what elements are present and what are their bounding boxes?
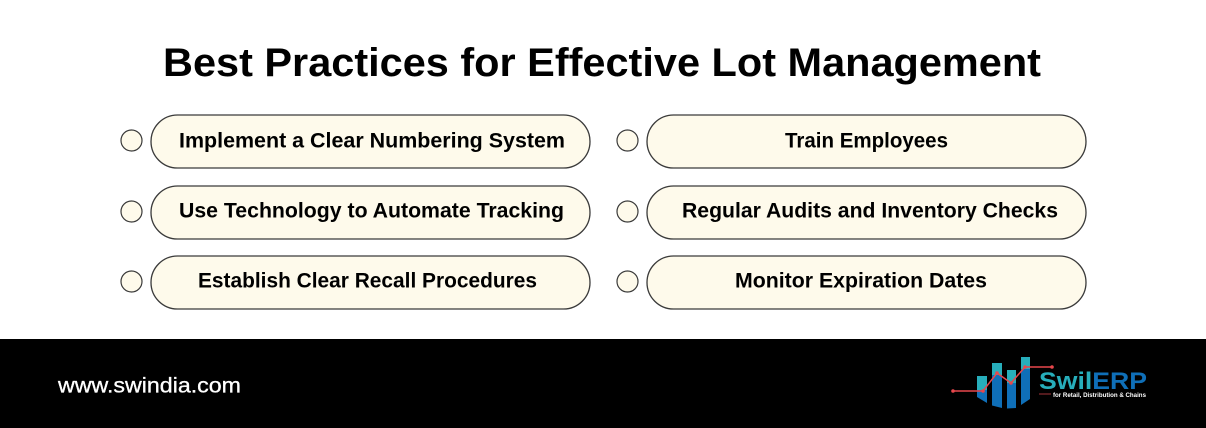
item: Use Technology to Automate Tracking: Use Technology to Automate Tracking <box>179 200 564 222</box>
footer band <box>0 339 1206 428</box>
item: Establish Clear Recall Procedures: Establish Clear Recall Procedures <box>198 270 537 292</box>
item: Monitor Expiration Dates: Monitor Expiration Dates <box>735 270 987 292</box>
item: Regular Audits and Inventory Checks: Regular Audits and Inventory Checks <box>682 200 1058 222</box>
item: Use Technology to Automate Tracking <box>121 186 590 239</box>
item: Monitor Expiration Dates <box>617 256 1086 309</box>
logo wordmark: SwilERP <box>1039 368 1147 395</box>
item: Implement a Clear Numbering System <box>121 115 590 168</box>
item: Train Employees <box>617 115 1086 168</box>
title: Best Practices for Effective Lot Management <box>163 41 1041 85</box>
logo: SwilERP <box>951 357 1147 408</box>
icon: logo bars <box>977 357 1030 408</box>
item: Train Employees: Train Employees <box>785 130 948 152</box>
item: Regular Audits and Inventory Checks <box>617 186 1086 239</box>
website url: www.swindia.com <box>57 375 241 398</box>
item: Establish Clear Recall Procedures <box>121 256 590 309</box>
icon: red trend line <box>951 365 1054 393</box>
item: Implement a Clear Numbering System: Implement a Clear Numbering System <box>179 130 565 152</box>
logo tagline: for Retail, Distribution & Chains <box>1053 392 1146 399</box>
